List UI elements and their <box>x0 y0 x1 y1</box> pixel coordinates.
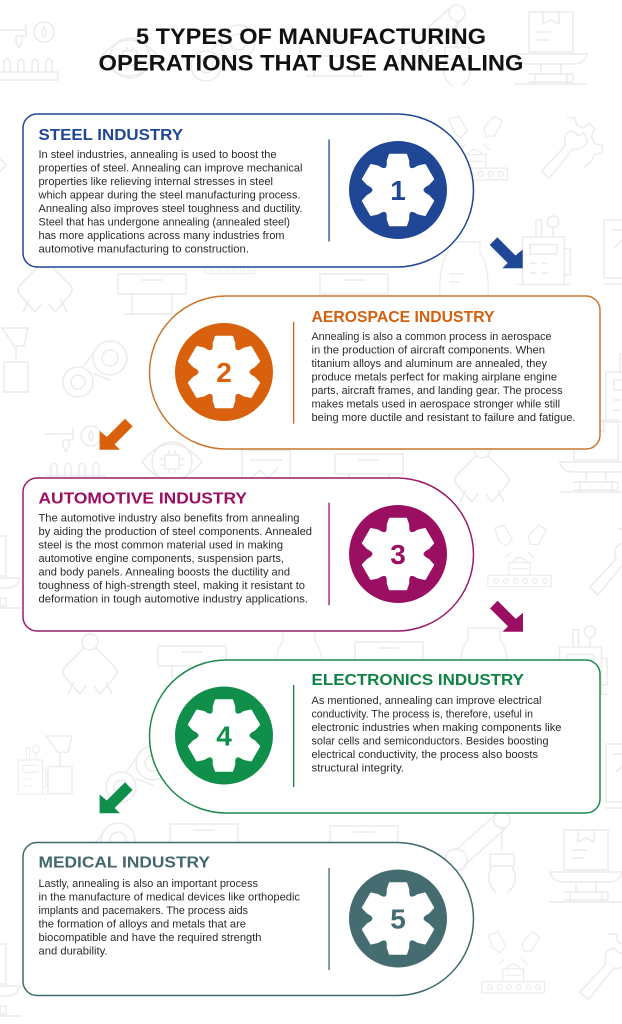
card outline <box>150 660 600 813</box>
body text: properties of steel. Annealing can improve mechanical <box>38 162 302 174</box>
body text: solar cells and semiconductors. Besides boosting <box>312 736 548 748</box>
body text: Lastly, annealing is also an important process <box>38 878 258 890</box>
body text: biocompatible and have the required strength <box>38 932 262 944</box>
body text: Annealing is also a common process in aerospace <box>312 331 552 343</box>
body text: toughness of high-strength steel, making it resistant to <box>38 580 305 592</box>
body text: has more applications across many industries from <box>38 230 284 242</box>
panel: steel industry <box>23 114 474 267</box>
body text: which appear during the steel manufacturing process. <box>38 190 300 202</box>
heading: STEEL INDUSTRY <box>38 127 183 144</box>
body text: properties like relieving internal stresses in steel <box>38 176 273 188</box>
panel: electronics industry <box>150 660 600 813</box>
card outline <box>150 296 600 449</box>
icon: numbered gear 4 <box>175 686 273 784</box>
body text: being more ductile and resistant to failure and fatigue. <box>312 412 576 424</box>
body text: conductivity. The process is, therefore, useful in <box>312 708 533 720</box>
heading: AUTOMOTIVE INDUSTRY <box>38 490 247 507</box>
heading: AEROSPACE INDUSTRY <box>312 309 495 326</box>
body text: the formation of alloys and metals that are <box>38 918 246 930</box>
body text: implants and pacemakers. The process aids <box>38 905 248 917</box>
body text: steel is the most common material used in making <box>38 540 283 552</box>
body text: in the production of aircraft components. When <box>312 344 545 356</box>
divider <box>293 685 294 787</box>
divider <box>293 322 294 424</box>
body text: by aiding the production of steel components. Annealed <box>38 526 312 538</box>
icon: numbered gear 5: 5 <box>390 904 406 934</box>
icon: numbered gear 1: 1 <box>390 175 406 206</box>
body text: automotive manufacturing to construction. <box>38 244 249 256</box>
arrow: aerospace to automotive <box>100 419 133 450</box>
icon: numbered gear 2: 2 <box>216 357 232 388</box>
body text: and body panels. Annealing boosts the ductility and <box>38 567 290 579</box>
title: OPERATIONS THAT USE ANNEALING <box>98 51 524 76</box>
divider <box>328 503 330 605</box>
arrow: steel to aerospace <box>490 237 523 268</box>
icon: numbered gear 2 <box>175 323 273 421</box>
body text <box>38 149 302 256</box>
body text: As mentioned, annealing can improve electrical <box>312 695 542 707</box>
body text: parts, aircraft frames, and landing gear. The process <box>312 385 563 397</box>
arrow: electronics to medical <box>100 782 133 813</box>
body text: Annealing also improves steel toughness and ductility. <box>38 203 302 215</box>
icon: numbered gear 4: 4 <box>216 720 232 752</box>
body text: Steel that has undergone annealing (annealed steel) <box>38 216 290 228</box>
body text: In steel industries, annealing is used to boost the <box>38 149 276 161</box>
heading: MEDICAL INDUSTRY <box>38 855 210 872</box>
body text: and durability. <box>38 946 108 958</box>
panel: aerospace industry <box>150 296 600 449</box>
body text: produce metals perfect for making airplane engine <box>312 372 557 384</box>
body text: titanium alloys and aluminum are annealed, they <box>312 358 547 370</box>
card outline <box>23 478 474 631</box>
title: 5 TYPES OF MANUFACTURING <box>136 24 486 49</box>
heading: ELECTRONICS INDUSTRY <box>312 672 524 689</box>
body text: deformation in tough automotive industry applications. <box>38 594 308 606</box>
body text: makes metals used in aerospace stronger while still <box>312 398 560 410</box>
panel: medical industry <box>23 842 474 996</box>
body text: The automotive industry also benefits from annealing <box>38 513 300 525</box>
body text: structural integrity. <box>312 762 404 774</box>
arrow: automotive to electronics <box>490 601 523 632</box>
divider <box>328 140 330 242</box>
card outline <box>23 114 474 267</box>
panel: automotive industry <box>23 478 474 631</box>
title <box>98 24 524 76</box>
body text: in the manufacture of medical devices like orthopedic <box>38 892 300 904</box>
icon: numbered gear 1 <box>349 141 447 239</box>
body text: automotive engine components, suspension parts, <box>38 553 284 565</box>
body text <box>312 331 576 424</box>
icon: numbered gear 3: 3 <box>390 539 406 570</box>
card outline <box>23 842 474 996</box>
body text <box>38 513 312 606</box>
icon: numbered gear 3 <box>349 505 447 603</box>
icon: numbered gear 5 <box>349 870 447 968</box>
body text <box>38 878 300 958</box>
body text: electronic industries when making components like <box>312 722 562 734</box>
body text: electrical conductivity, the process also boosts <box>312 749 538 761</box>
body text <box>312 695 562 774</box>
divider <box>328 868 330 970</box>
